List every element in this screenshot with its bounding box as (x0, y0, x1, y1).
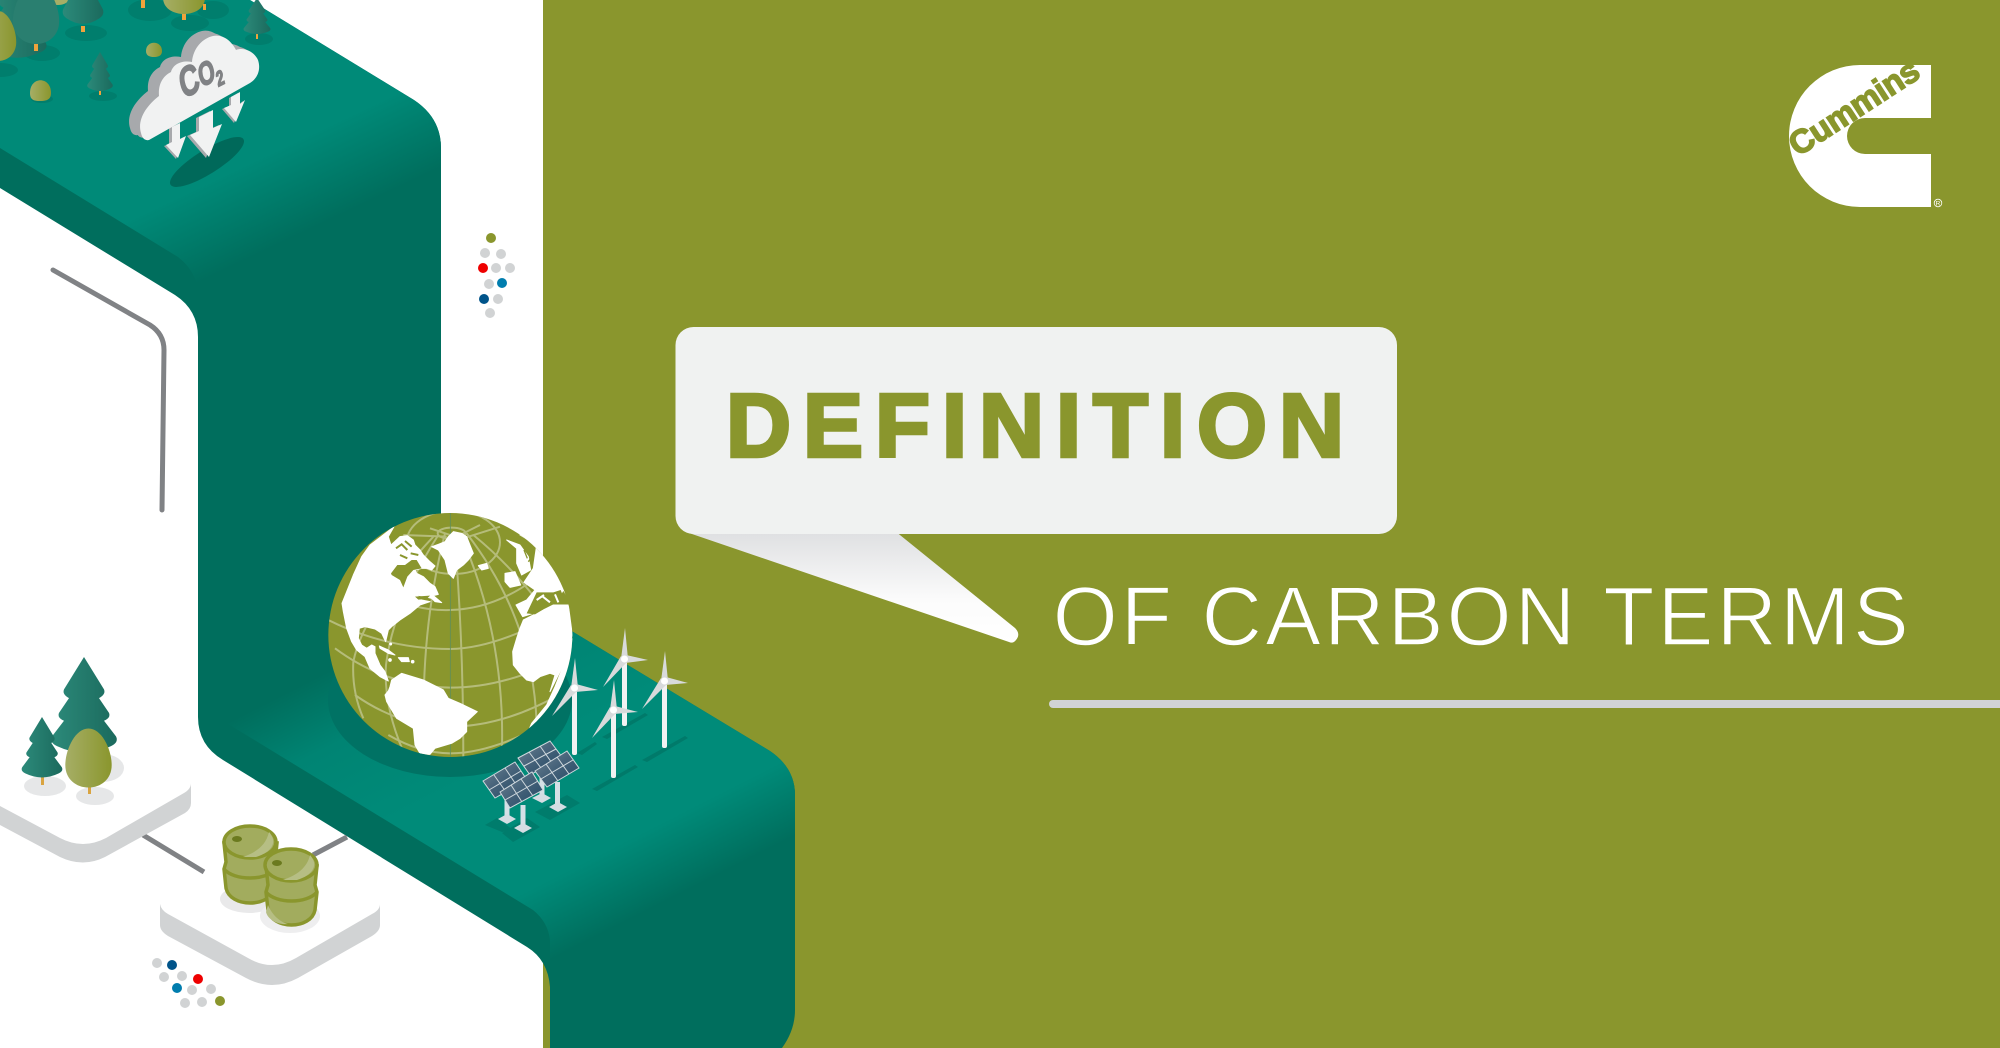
divider rule (1049, 700, 2000, 708)
dots: upper cluster (478, 233, 515, 318)
continents (342, 525, 587, 758)
turbine 3 (592, 680, 638, 778)
globe grid (328, 511, 573, 758)
speech bubble (676, 327, 1397, 643)
turbine 4 (642, 651, 688, 748)
icon: CO2 cloud (129, 31, 259, 195)
dots: lower cluster (152, 958, 225, 1008)
globe shadow (328, 623, 572, 777)
white tile with oil barrels (160, 826, 380, 985)
icon: barrel back (224, 826, 277, 903)
olive background panel (543, 0, 2000, 1048)
teal isometric ribbon (0, 0, 795, 1048)
forest on upper ribbon (0, 0, 273, 103)
heading: definition: DEFINITION (726, 376, 1344, 476)
grey connector line: upper (53, 270, 164, 510)
icon: barrel front (265, 849, 317, 925)
icon: CO2 cloud: C (175, 53, 204, 108)
white tile with trees (0, 657, 191, 862)
Cummins logo: R (1936, 200, 1941, 208)
solar panel back right (535, 751, 579, 812)
solar panel front left (483, 762, 527, 824)
icon: CO2 cloud: O (195, 51, 218, 94)
grey connector lines: lower (143, 835, 347, 872)
Cummins logo (1782, 51, 1942, 208)
subheading: OF CARBON TERMS (1053, 569, 1909, 663)
solar panel back left (518, 741, 562, 803)
inland water (391, 541, 566, 614)
turbine 1 (552, 658, 598, 755)
solar panels (483, 741, 580, 842)
turbine 2 (603, 628, 648, 726)
wind turbines (552, 628, 688, 791)
Cummins logo: Cummins (1782, 51, 1926, 163)
icon: CO2 cloud: 2 (214, 65, 226, 91)
solar panel front right (500, 772, 543, 833)
icon: globe (328, 511, 587, 758)
Mediterranean land (537, 594, 558, 602)
